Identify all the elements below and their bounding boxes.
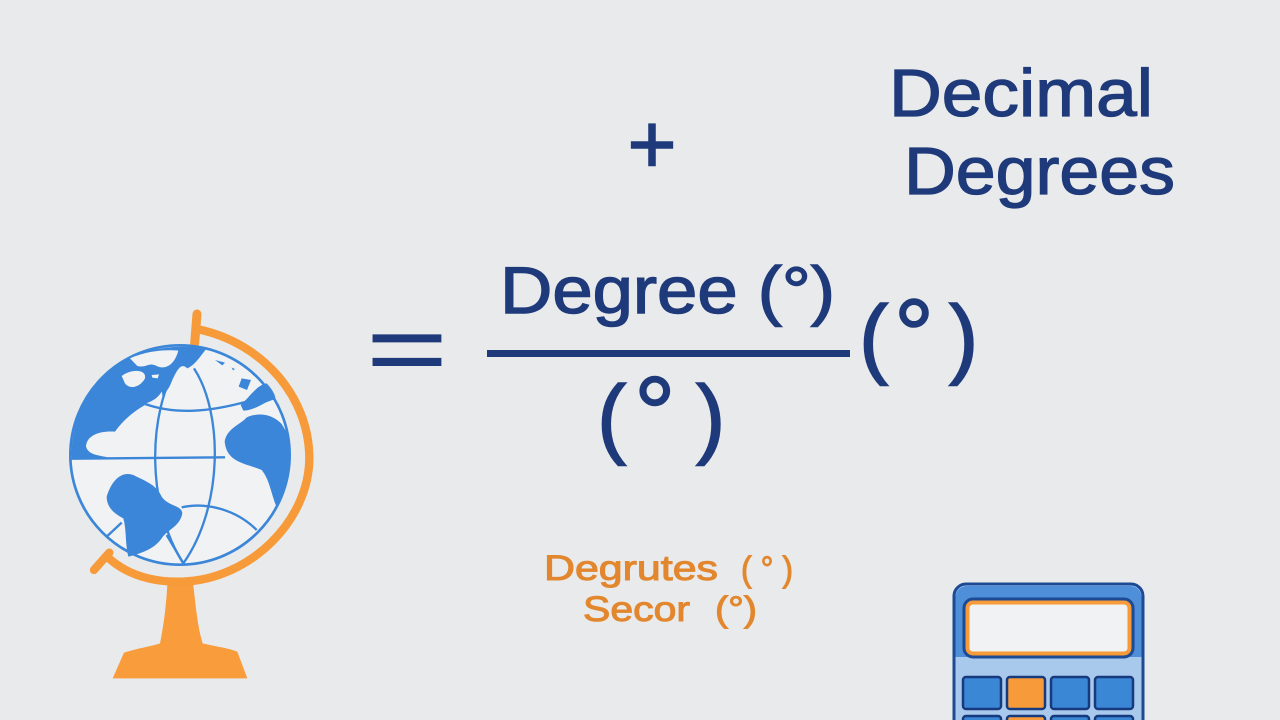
calculator top panel <box>956 586 1142 657</box>
trailing degree symbol in parentheses <box>859 279 978 391</box>
graticule lines <box>71 363 257 563</box>
fraction denominator: degree symbol in parentheses: ) <box>696 367 725 466</box>
orange labels: minutes and seconds: Secor <box>583 590 690 629</box>
icon: calculator <box>954 584 1143 720</box>
trailing degree symbol in parentheses: ) <box>949 287 978 386</box>
heading: decimal degrees: Decimal <box>889 56 1153 131</box>
orange labels: minutes and seconds: Degrutes <box>544 549 718 588</box>
fraction denominator: degree symbol in parentheses: ° <box>634 356 676 472</box>
globe meridian arm <box>94 314 309 582</box>
orange labels: minutes and seconds <box>544 549 793 629</box>
fraction denominator: degree symbol in parentheses <box>597 356 725 472</box>
equals sign: = <box>367 297 447 402</box>
plus sign: + <box>627 97 677 191</box>
fraction bar <box>487 350 850 357</box>
icon: globe on stand <box>70 314 309 678</box>
globe sphere <box>70 345 290 565</box>
trailing degree symbol in parentheses: ( <box>859 287 888 386</box>
fraction denominator: degree symbol in parentheses: ( <box>597 367 626 466</box>
fraction numerator: degree: Degree (°) <box>500 253 835 327</box>
calculator body <box>954 584 1143 720</box>
heading: decimal degrees: Degrees <box>904 134 1175 209</box>
arctic islands <box>122 350 178 404</box>
orange labels: minutes and seconds: ( ° ) <box>741 550 793 589</box>
calculator display <box>967 602 1130 654</box>
orange labels: minutes and seconds: (°) <box>715 590 757 629</box>
heading: decimal degrees <box>889 56 1175 209</box>
trailing degree symbol in parentheses: ° <box>894 279 934 391</box>
continents <box>71 347 290 557</box>
calculator keys <box>963 677 1133 720</box>
globe stand base <box>113 585 247 678</box>
